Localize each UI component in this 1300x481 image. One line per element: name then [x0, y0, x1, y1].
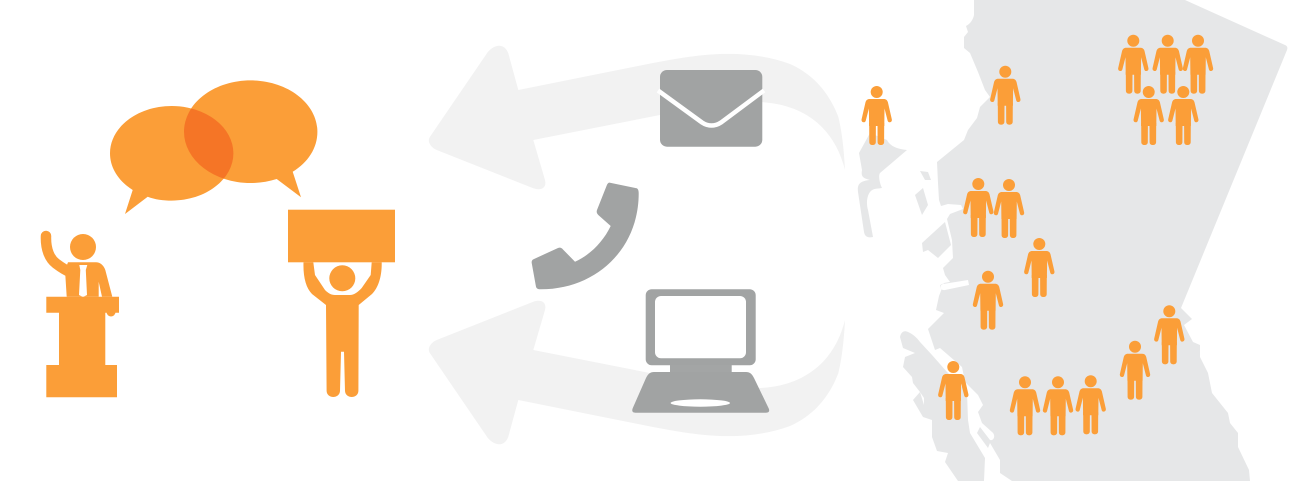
speaker torso	[65, 262, 112, 297]
icon: envelope	[658, 70, 764, 147]
person	[1118, 35, 1148, 94]
arrow: upper return arrow	[429, 46, 845, 189]
speaker head	[70, 234, 96, 260]
trackpad slot	[671, 399, 730, 407]
person: southern interior	[1120, 341, 1150, 400]
person: mid coast	[973, 271, 1003, 330]
envelope flap line	[658, 90, 764, 126]
person	[994, 179, 1024, 238]
person	[1183, 35, 1213, 94]
person	[1168, 86, 1198, 145]
right speech bubble	[184, 80, 317, 197]
arrow: lower return arrow	[429, 301, 845, 444]
group: southern trio	[1010, 375, 1106, 435]
blank sign	[288, 210, 395, 262]
group: northeast five people	[1118, 35, 1213, 145]
monitor frame	[646, 289, 756, 365]
person	[1043, 376, 1073, 435]
left speech bubble	[110, 106, 233, 214]
icon: person holding sign	[288, 210, 395, 397]
icon: telephone	[532, 183, 639, 289]
person	[1010, 376, 1040, 435]
map: southern island	[900, 331, 985, 481]
person: southern island	[938, 361, 968, 420]
person: north coast	[990, 66, 1020, 125]
speaker raised arm	[46, 236, 70, 272]
monitor screen	[655, 296, 746, 358]
group: central coast pair	[963, 178, 1024, 238]
bubble overlap	[184, 108, 234, 178]
sign holder head	[329, 265, 355, 291]
panel: province map	[858, 0, 1287, 481]
speaker tie	[79, 265, 87, 297]
map: inland water outline	[941, 280, 969, 290]
person: northwest coast	[862, 86, 892, 145]
keyboard base	[632, 372, 769, 413]
icon: speaker at podium	[46, 234, 119, 397]
icon: speech bubbles	[110, 80, 317, 214]
speaker hand	[106, 308, 116, 316]
person	[1153, 35, 1183, 94]
map: coastal island three	[922, 222, 951, 258]
podium	[46, 297, 119, 397]
person	[1134, 86, 1164, 145]
map: coastal island one	[920, 171, 931, 180]
person: eastern border	[1154, 305, 1184, 364]
map: mainland	[928, 0, 1287, 481]
person	[963, 178, 993, 237]
map: northern islands	[858, 133, 907, 237]
sign holder body	[303, 262, 382, 397]
envelope body	[660, 70, 762, 147]
icon: laptop computer	[632, 289, 769, 413]
map: coastal island two	[915, 188, 928, 215]
monitor neck	[670, 365, 732, 373]
person	[1076, 375, 1106, 434]
person: central interior	[1024, 238, 1054, 297]
